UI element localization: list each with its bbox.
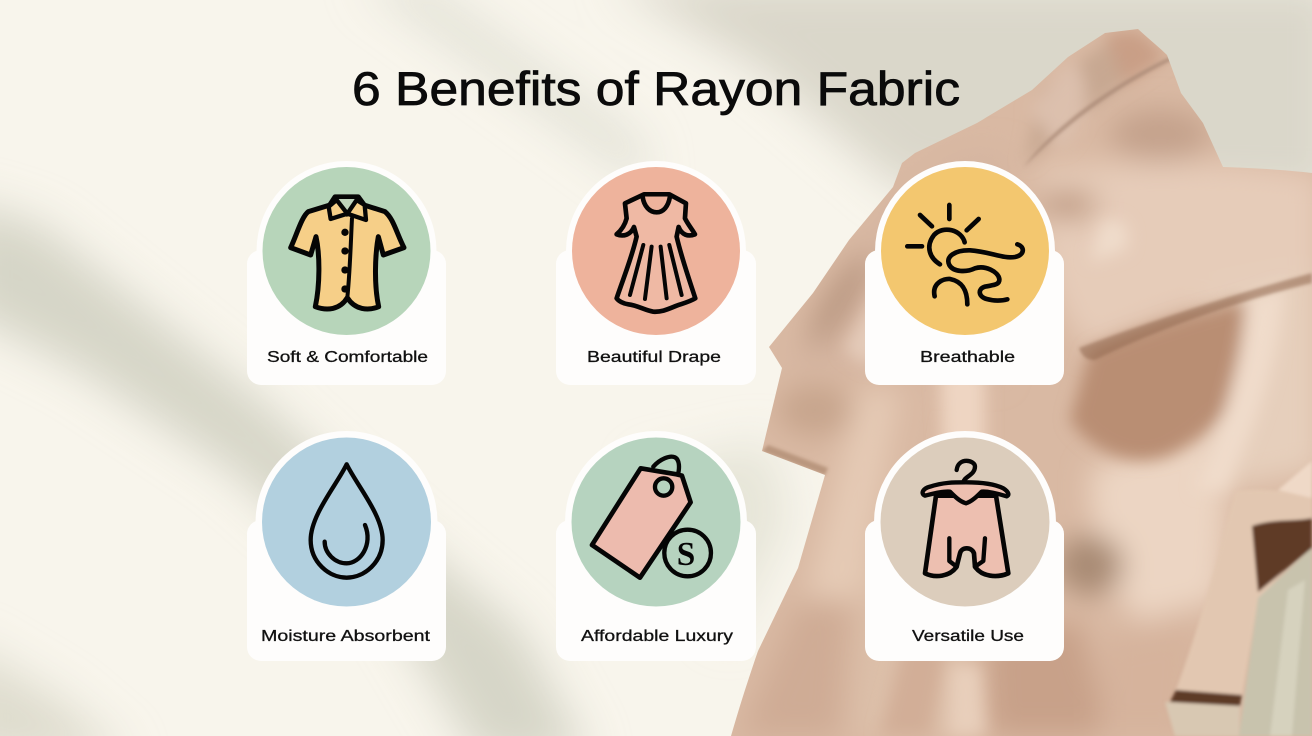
icon: dress	[617, 194, 695, 312]
icon: shirt	[291, 197, 404, 309]
label: Beautiful Drape	[587, 349, 721, 366]
panel: Breathable	[865, 161, 1064, 385]
icon: garment on hanger	[923, 461, 1008, 576]
label: Affordable Luxury	[581, 628, 733, 645]
label: Versatile Use	[912, 628, 1024, 645]
title: 6 Benefits of Rayon Fabric	[352, 62, 960, 115]
label: Moisture Absorbent	[261, 628, 431, 645]
icon: price tag with coin	[592, 457, 711, 578]
icon: price tag with coin: S	[677, 536, 695, 573]
panel: Affordable Luxury	[556, 431, 756, 661]
panel: Versatile Use	[865, 431, 1064, 661]
panel: Moisture Absorbent	[247, 431, 446, 661]
icon: sun and breeze	[907, 205, 1023, 304]
draped satin rayon fabric	[700, 0, 1312, 736]
panel: Beautiful Drape	[556, 161, 756, 385]
label: Breathable	[920, 349, 1015, 366]
panel: Soft & Comfortable	[247, 161, 446, 385]
icon: water drop	[311, 464, 383, 578]
label: Soft & Comfortable	[267, 349, 428, 366]
